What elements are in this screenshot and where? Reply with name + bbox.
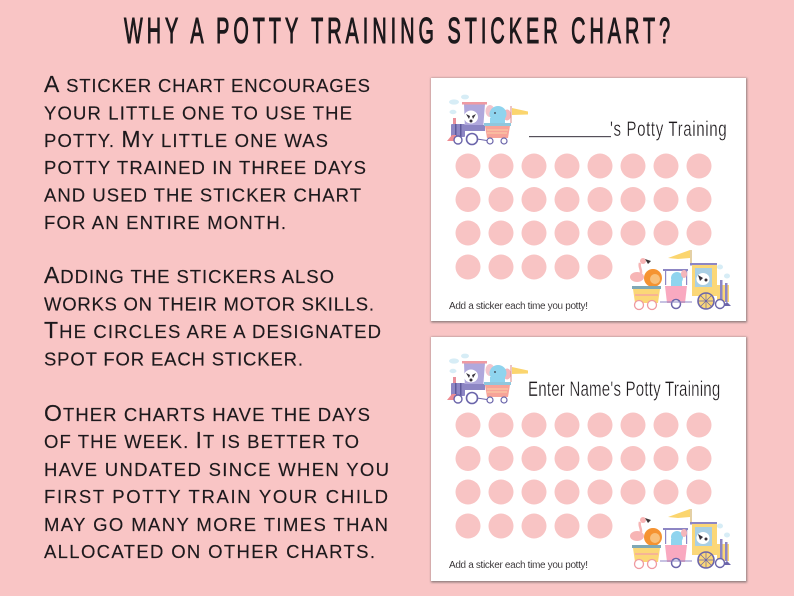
text block: why a sticker chart encourages: YOUR LITTLE ONE TO USE THE (44, 102, 352, 124)
text block: motor skills: ADDING THE STICKERS ALSO (44, 262, 334, 288)
panel: blank name chart (431, 78, 747, 322)
card with shadow (431, 78, 747, 322)
sticker circles (456, 154, 712, 280)
chart heading: Enter Name's Potty Training (528, 376, 720, 401)
text block: motor skills (44, 262, 381, 370)
text block: motor skills: THE CIRCLES ARE A DESIGNATED (44, 317, 381, 343)
title: WHY A POTTY TRAINING STICKER CHART? (124, 12, 670, 52)
text block: undated charts: HAVE UNDATED SINCE WHEN YOU (44, 459, 389, 480)
text block: why a sticker chart encourages: POTTY TRAINED IN THREE DAYS (44, 157, 366, 178)
text block: why a sticker chart encourages (44, 71, 370, 233)
text block: undated charts (44, 400, 389, 562)
name line (529, 136, 611, 137)
icon: yellow train (630, 509, 731, 568)
text block: undated charts: OTHER CHARTS HAVE THE DAYS (44, 400, 370, 426)
text block: undated charts: FIRST POTTY TRAIN YOUR CHILD (44, 486, 388, 507)
chart heading: 's Potty Training (610, 116, 727, 141)
text block: why a sticker chart encourages: AND USED THE STICKER CHART (44, 184, 361, 206)
text block: motor skills: WORKS ON THEIR MOTOR SKILLS. (44, 294, 374, 314)
instruction: Add a sticker each time you potty! (449, 301, 588, 312)
text block: motor skills: SPOT FOR EACH STICKER. (44, 348, 303, 370)
icon: purple train (447, 354, 528, 404)
text block: undated charts: ALLOCATED ON OTHER CHARTS. (44, 541, 375, 562)
text block: undated charts: MAY GO MANY MORE TIMES THAN (44, 514, 388, 535)
instruction: Add a sticker each time you potty! (449, 560, 588, 571)
sticker circles (456, 412, 712, 538)
icon: purple train (447, 95, 528, 144)
text block: why a sticker chart encourages: POTTY. MY LITTLE ONE WAS (44, 126, 328, 152)
panel: named chart (431, 337, 747, 582)
text block: why a sticker chart encourages: A STICKER CHART ENCOURAGES (44, 71, 370, 97)
text block: undated charts: OF THE WEEK. IT IS BETTER TO (44, 427, 359, 453)
icon: yellow train (630, 250, 731, 310)
text block: why a sticker chart encourages: FOR AN ENTIRE MONTH. (44, 212, 286, 233)
card with shadow (431, 337, 747, 582)
